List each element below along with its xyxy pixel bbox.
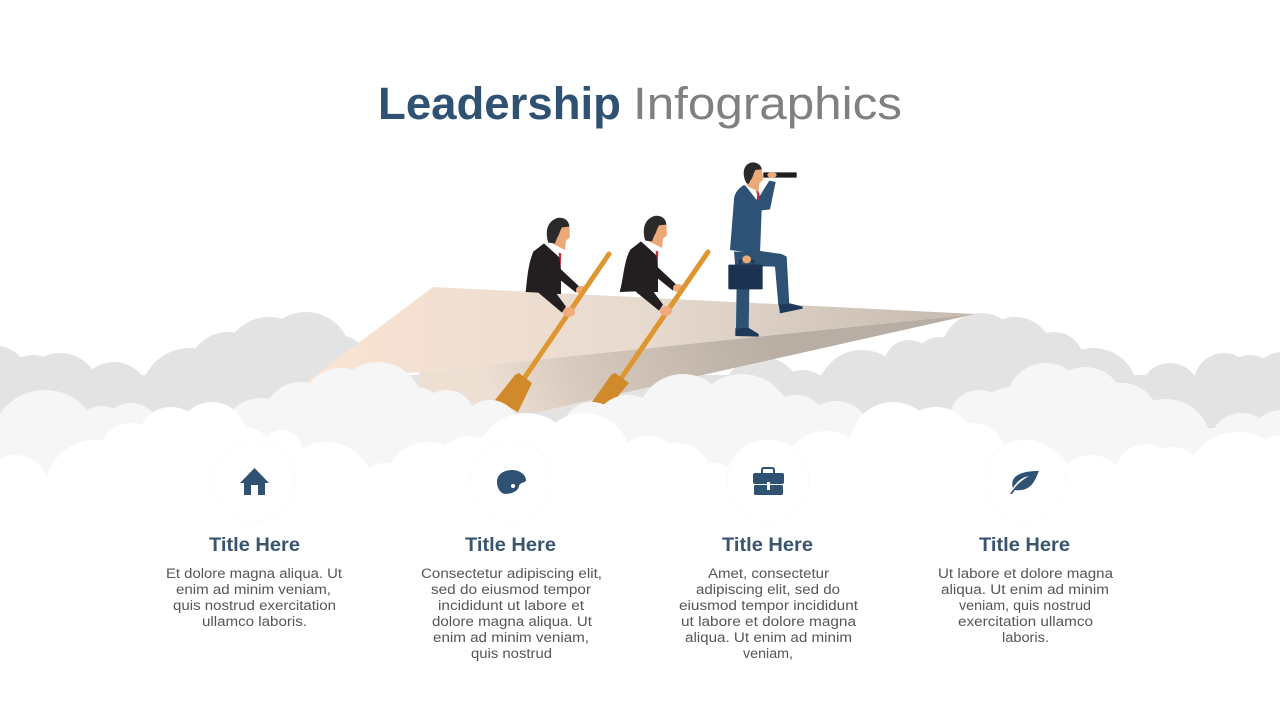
plane top wing (305, 287, 975, 383)
text block: aliqua. Ut enim ad minim (685, 630, 852, 645)
text block: Consectetur adipiscing elit, (421, 566, 602, 581)
icon: briefcase (727, 440, 809, 522)
text block: ut labore et dolore magna (681, 614, 857, 629)
shoes (735, 303, 803, 337)
title (378, 78, 902, 129)
middle cloud layer (0, 362, 1280, 500)
text block (166, 566, 342, 629)
rower figure 1 (526, 218, 586, 313)
heading: Title Here (465, 535, 556, 556)
text block: dolore magna aliqua. Ut (432, 614, 592, 629)
title: Infographics (633, 78, 902, 129)
column 2: palette (421, 440, 602, 661)
text block: quis nostrud exercitation (173, 598, 336, 613)
title: Leadership (378, 78, 621, 129)
heading: Title Here (209, 535, 300, 556)
column 3: briefcase (679, 440, 858, 661)
text block (421, 566, 602, 661)
rower figure 2 (620, 216, 683, 311)
text block: veniam, (743, 646, 793, 661)
leader with telescope (728, 162, 803, 337)
oar 2 (592, 252, 708, 406)
briefcase (728, 255, 763, 289)
jacket (730, 181, 776, 254)
plane lower body (419, 314, 975, 440)
text block: incididunt ut labore et (438, 598, 584, 613)
text block: enim ad minim veniam, (176, 582, 331, 597)
column 4: leaf (938, 440, 1114, 645)
text block: ullamco laboris. (202, 614, 307, 629)
text block: Et dolore magna aliqua. Ut (166, 566, 342, 581)
text block: quis nostrud (471, 646, 552, 661)
text block: veniam, quis nostrud (959, 598, 1091, 613)
heading: Title Here (722, 535, 813, 556)
text block: Ut labore et dolore magna (938, 566, 1114, 581)
paper plane (305, 287, 975, 440)
text block (938, 566, 1114, 645)
telescope (763, 172, 797, 178)
back cloud layer (0, 312, 1280, 475)
oar 1 (495, 254, 609, 412)
text block (679, 566, 858, 661)
front cloud layer (0, 402, 1280, 720)
suit legs (734, 249, 789, 328)
text block: aliqua. Ut enim ad minim (941, 582, 1109, 597)
icon: palette (470, 440, 552, 522)
text block: Amet, consectetur (708, 566, 830, 581)
column 1: home (166, 440, 342, 629)
text block: eiusmod tempor incididunt (679, 598, 858, 613)
head (744, 162, 763, 192)
text block: enim ad minim veniam, (433, 630, 589, 645)
icon: home (213, 440, 295, 522)
heading: Title Here (979, 535, 1070, 556)
text block: laboris. (1002, 630, 1049, 645)
text block: adipiscing elit, sed do (696, 582, 840, 597)
text block: sed do eiusmod tempor (431, 582, 592, 597)
text block: exercitation ullamco (958, 614, 1093, 629)
icon: leaf (984, 440, 1066, 522)
